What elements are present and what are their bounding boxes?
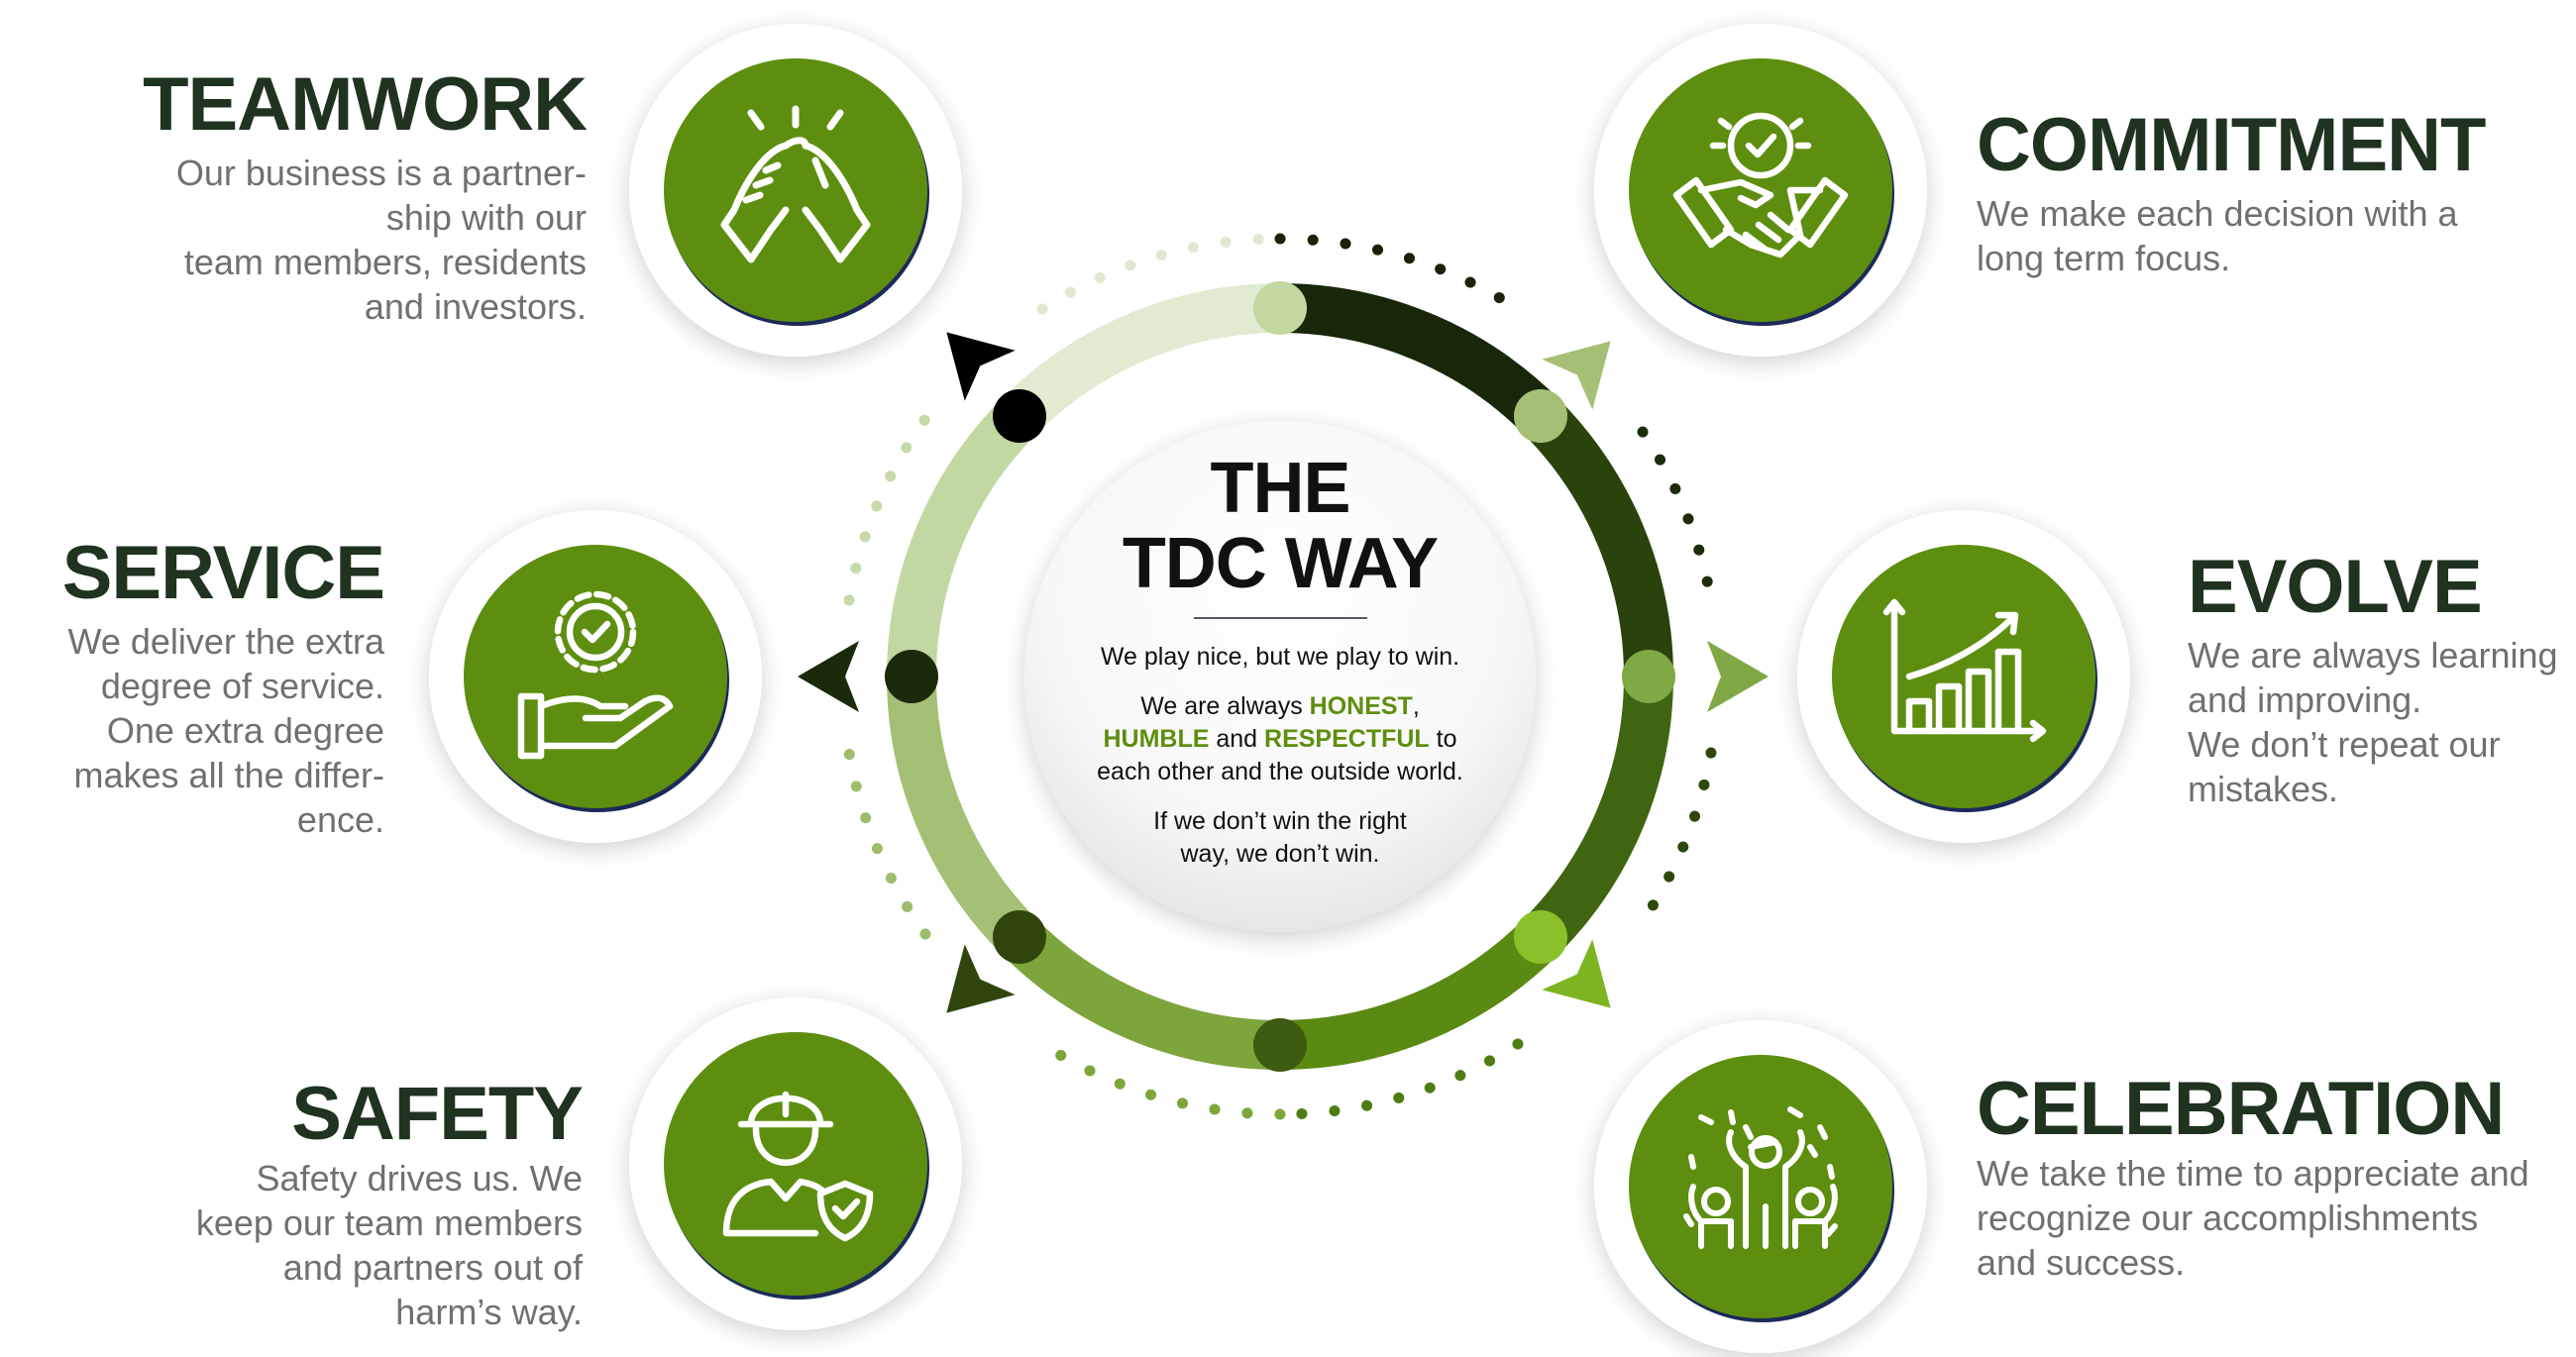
center text: the tdc way: THE xyxy=(1211,449,1349,528)
title: evolve xyxy=(2188,545,2558,809)
icon: safety xyxy=(629,997,962,1330)
text: commitment: long term focus. xyxy=(1977,238,2230,278)
title: celebration: CELEBRATION xyxy=(1977,1067,2504,1151)
arrows xyxy=(798,307,1769,1038)
main ring xyxy=(912,308,1649,1045)
center text: the tdc way: each other and the outside world. xyxy=(1097,758,1463,785)
text: safety: and partners out of xyxy=(283,1247,583,1288)
icon: service xyxy=(429,510,762,843)
icon: teamwork xyxy=(629,24,962,357)
text: evolve: We don’t repeat our xyxy=(2188,724,2501,765)
text: celebration xyxy=(1977,1153,2529,1283)
text: commitment: We make each decision with a xyxy=(1977,193,2458,234)
text: service: We deliver the extra xyxy=(68,621,384,662)
text: celebration: and success. xyxy=(1977,1242,2185,1283)
text: celebration: We take the time to appreciate and xyxy=(1977,1153,2529,1194)
center text: the tdc way: If we don’t win the right xyxy=(1153,807,1407,835)
text: teamwork: and investors. xyxy=(365,286,587,327)
text: teamwork: team members, residents xyxy=(184,242,587,282)
title: commitment: COMMITMENT xyxy=(1977,103,2485,187)
center text: the tdc way: way, we don’t win. xyxy=(1180,840,1379,868)
title: teamwork xyxy=(143,62,587,327)
title: commitment xyxy=(1977,103,2486,278)
text: evolve: mistakes. xyxy=(2188,769,2338,809)
text: service: makes all the differ- xyxy=(74,755,384,795)
center text: the tdc way xyxy=(1097,449,1463,868)
text: service: ence. xyxy=(297,799,384,840)
ring markers xyxy=(885,281,1675,1072)
center text: the tdc way: We play nice, but we play to win. xyxy=(1101,643,1459,671)
text: celebration: recognize our accomplishments xyxy=(1977,1198,2478,1238)
title: service: SERVICE xyxy=(62,531,384,615)
center text: the tdc way: HUMBLE and RESPECTFUL to xyxy=(1103,725,1457,753)
text: service: degree of service. xyxy=(101,666,384,706)
title: service xyxy=(62,531,384,840)
text: evolve: We are always learning xyxy=(2188,635,2558,676)
text: commitment xyxy=(1977,193,2458,278)
text: safety: Safety drives us. We xyxy=(257,1158,583,1199)
text: service: One extra degree xyxy=(107,710,384,751)
text: safety: keep our team members xyxy=(196,1202,583,1243)
icon: evolve xyxy=(1797,510,2130,843)
dotted outer ring xyxy=(849,239,1711,1114)
title: safety xyxy=(196,1072,583,1332)
text: teamwork: ship with our xyxy=(386,197,587,238)
text: service xyxy=(67,621,384,840)
text: evolve: and improving. xyxy=(2188,679,2421,720)
title: evolve: EVOLVE xyxy=(2188,545,2482,629)
text: teamwork xyxy=(176,153,587,327)
text: safety xyxy=(196,1158,583,1332)
text: teamwork: Our business is a partner- xyxy=(176,153,587,193)
center white circle xyxy=(1024,421,1536,932)
title: safety: SAFETY xyxy=(291,1072,583,1156)
text: safety: harm’s way. xyxy=(395,1292,583,1332)
title: celebration xyxy=(1977,1067,2529,1283)
icon: celebration xyxy=(1594,1020,1927,1353)
title: teamwork: TEAMWORK xyxy=(143,62,587,147)
center text: the tdc way: TDC WAY xyxy=(1123,524,1438,603)
text: evolve xyxy=(2188,635,2558,809)
center text: the tdc way: We are always HONEST, xyxy=(1140,692,1420,720)
icon: commitment xyxy=(1594,24,1927,357)
